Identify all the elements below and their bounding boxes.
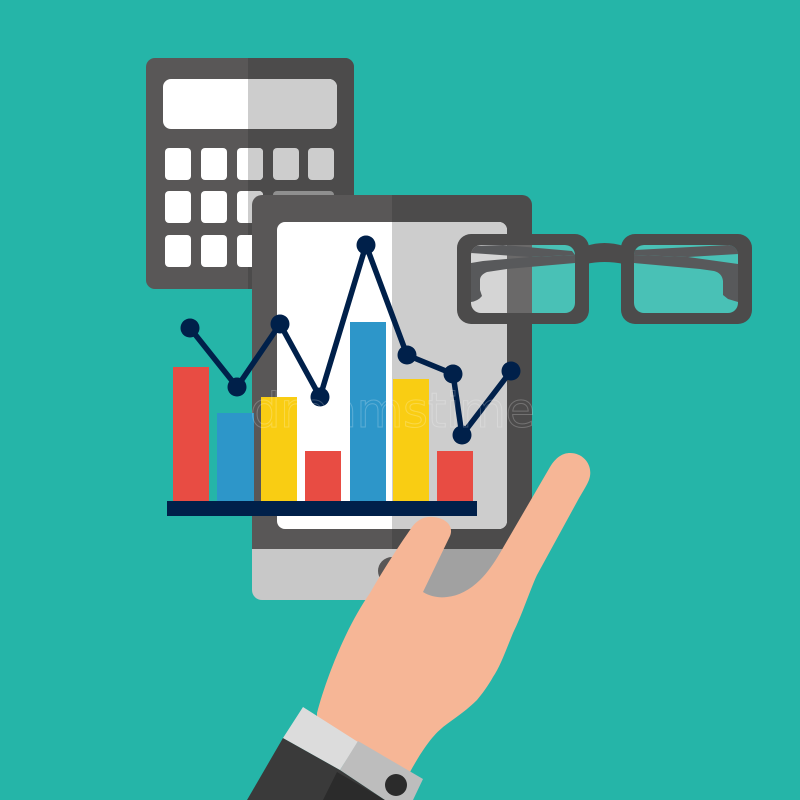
cuff [283, 707, 423, 800]
icon: hand [317, 453, 590, 780]
illustration [146, 58, 752, 800]
frame [457, 234, 589, 324]
bridge [586, 243, 624, 264]
left lens [471, 245, 575, 313]
icon: calculator [146, 58, 354, 289]
calculator keys [165, 148, 334, 267]
chart baseline [167, 501, 477, 516]
icon: smartphone [252, 195, 532, 600]
watermark: dreamstime [250, 383, 535, 439]
icon: shirt cuff and sleeve [247, 707, 423, 800]
phone home button [378, 557, 406, 585]
line chart [180, 236, 520, 444]
calculator screen [163, 79, 337, 129]
phone lower shaded area [420, 549, 510, 600]
sleeve [247, 738, 385, 800]
icon: glasses [457, 234, 752, 324]
right lens [634, 245, 738, 313]
bar chart [167, 322, 477, 516]
phone screen [277, 222, 507, 529]
cuff button [385, 774, 407, 796]
